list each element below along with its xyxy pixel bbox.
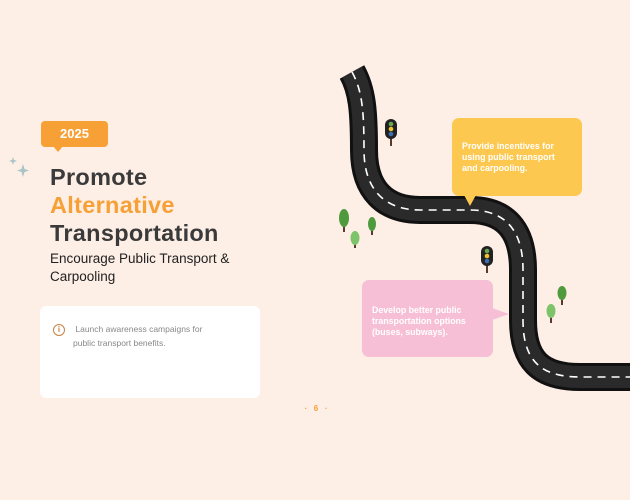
icon: info: i — [58, 325, 60, 334]
badge: 2025 — [41, 121, 108, 152]
title: Alternative — [50, 192, 175, 218]
badge: 2025: 2025 — [60, 126, 89, 141]
title: Transportation — [50, 220, 219, 246]
icon: info — [53, 324, 65, 336]
icon: sparkle — [9, 157, 29, 177]
card text: Launch awareness campaigns for public transport benefits. — [73, 324, 202, 348]
callout: better options — [362, 280, 509, 357]
subtitle: Encourage Public Transport & Carpooling — [50, 251, 229, 284]
callout: incentives: Provide incentives for using public transport and carpooling. — [462, 141, 555, 173]
page number: · 6 · — [304, 404, 328, 413]
icon: trees — [339, 209, 566, 323]
icon: traffic light 2 — [481, 246, 493, 273]
panel: card — [40, 306, 260, 398]
callout: incentives — [452, 118, 582, 206]
callout: better options: Develop better public transportation options (buses, subways). — [372, 305, 466, 337]
title — [50, 164, 219, 246]
icon: traffic light 1 — [385, 119, 397, 146]
title: Promote — [50, 164, 147, 190]
